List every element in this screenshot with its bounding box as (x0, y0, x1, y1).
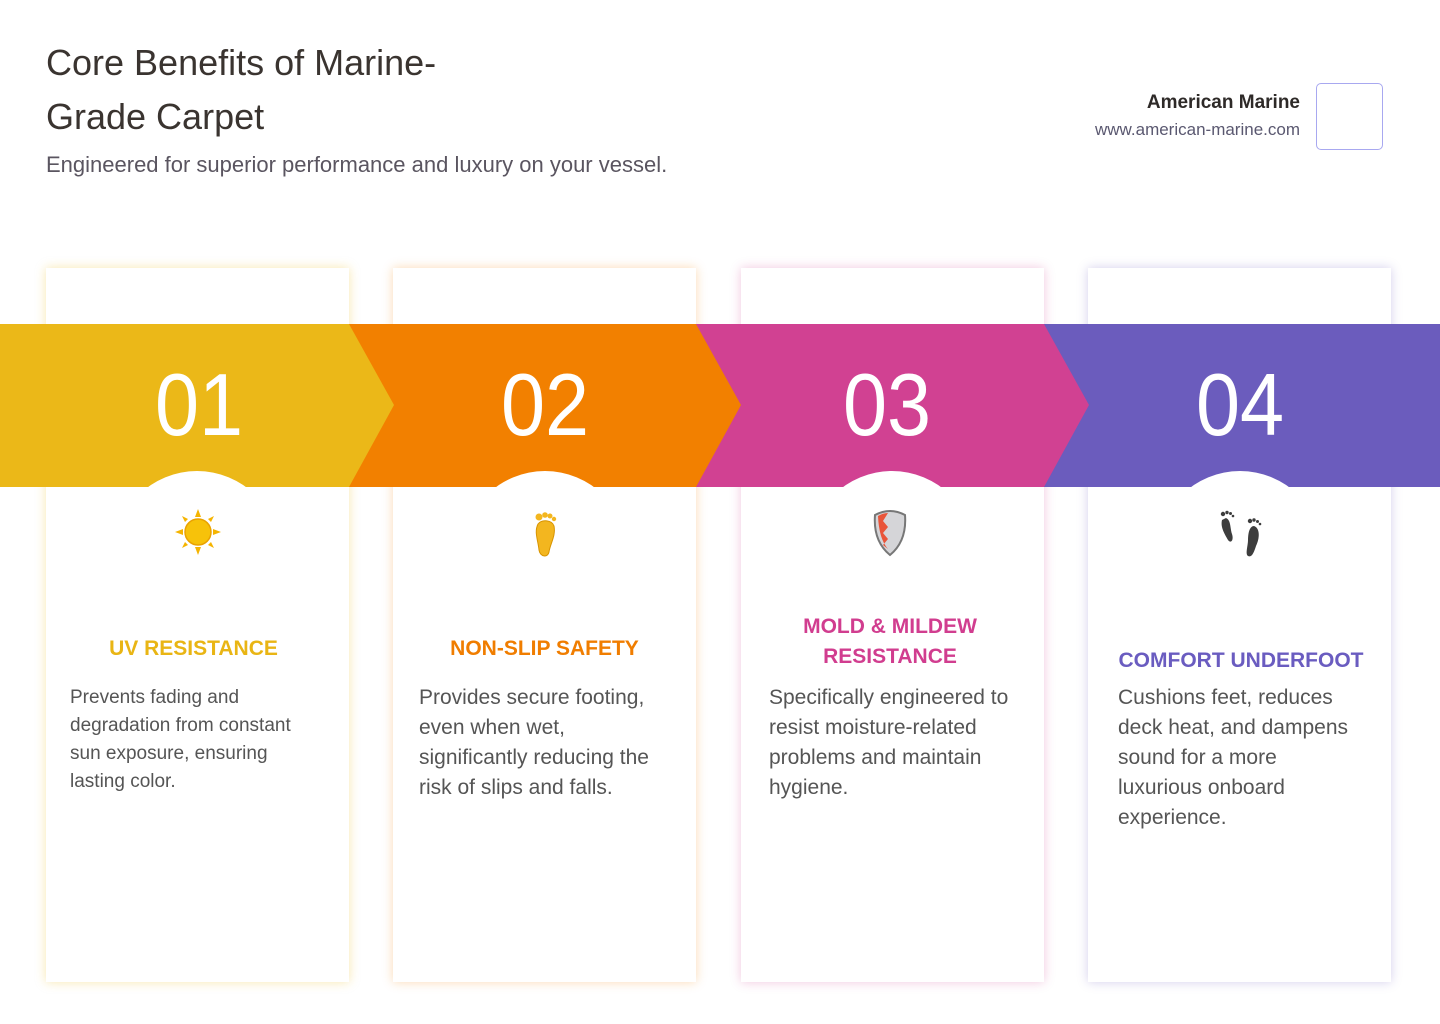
subtitle: Engineered for superior performance and luxury on your vessel. (46, 152, 667, 177)
number 02: 02 (501, 355, 589, 454)
panel: card 4 (1088, 268, 1391, 982)
brand name: American Marine (1147, 92, 1300, 113)
title: Core Benefits of Marine- (46, 42, 436, 83)
icon: footprints (1220, 510, 1262, 556)
brand block (1095, 83, 1383, 150)
icon: sun (175, 509, 221, 555)
icon: shield (874, 510, 906, 556)
card 4 body: Cushions feet, reduces deck heat, and dampens sound for a more luxurious onboard experience. (1118, 686, 1348, 829)
icon: foot (536, 512, 556, 556)
card 2 body: Provides secure footing, even when wet, significantly reducing the risk of slips and falls. (419, 686, 649, 799)
card 1 title: UV RESISTANCE (109, 637, 278, 660)
card 2 title: NON-SLIP SAFETY (450, 637, 639, 660)
panel: card 3 (741, 268, 1044, 982)
title (46, 42, 436, 137)
number 01: 01 (155, 355, 243, 454)
card 3 body: Specifically engineered to resist moisture-related problems and maintain hygiene. (769, 686, 1008, 799)
logo box (1316, 83, 1383, 150)
number 03: 03 (843, 355, 931, 454)
card 3 title: MOLD & MILDEW (803, 615, 977, 638)
card 3 title (803, 615, 977, 668)
card 1 body: Prevents fading and degradation from constant sun exposure, ensuring lasting color. (70, 687, 291, 792)
panel: card 1 (46, 268, 349, 982)
card 3 title: RESISTANCE (823, 645, 957, 668)
title: Grade Carpet (46, 96, 264, 137)
card 4 title: COMFORT UNDERFOOT (1118, 649, 1363, 672)
number 04: 04 (1196, 355, 1284, 454)
panel: card 2 (393, 268, 696, 982)
brand url: www.american-marine.com (1095, 120, 1300, 139)
